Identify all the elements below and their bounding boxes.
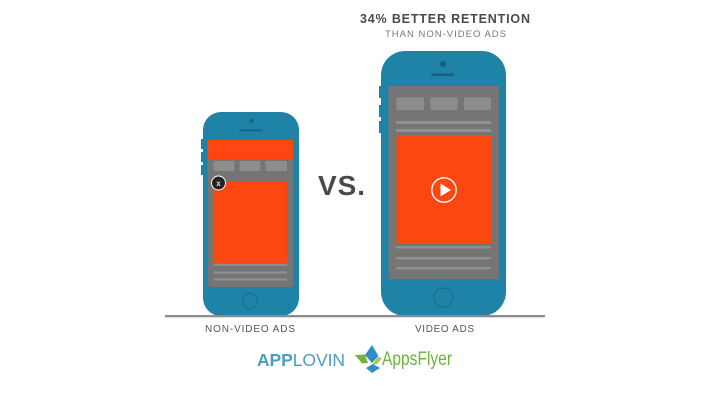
home button bbox=[242, 294, 258, 308]
heading: retention claim bbox=[360, 12, 530, 40]
close button bbox=[212, 176, 226, 190]
label: video ads: VIDEO ADS bbox=[415, 324, 474, 335]
content lines bottom bbox=[396, 246, 491, 270]
heading: retention claim: 34% BETTER RETENTION bbox=[360, 12, 530, 26]
content lines top bbox=[396, 121, 491, 132]
heading: retention claim: THAN NON-VIDEO ADS bbox=[385, 29, 506, 40]
phone: non-video ads bbox=[201, 112, 299, 316]
content lines bbox=[214, 264, 287, 280]
logo: AppsFlyer bbox=[355, 345, 453, 373]
phone: video ads bbox=[379, 51, 506, 316]
video ad bbox=[396, 136, 491, 243]
tabs bbox=[214, 161, 287, 171]
full-screen ad bbox=[214, 181, 287, 263]
tabs bbox=[396, 98, 491, 110]
vs label: VS. bbox=[318, 170, 365, 201]
home button bbox=[434, 288, 453, 307]
logo: AppsFlyer: AppsFlyer bbox=[382, 349, 453, 370]
logo: AppLovin: APPLOVIN bbox=[257, 350, 345, 370]
icon: AppsFlyer mark bbox=[355, 345, 382, 373]
ground line bbox=[165, 315, 545, 317]
label: non-video ads: NON-VIDEO ADS bbox=[205, 324, 295, 335]
close button: x bbox=[216, 179, 221, 188]
play button bbox=[432, 178, 456, 202]
top banner ad bbox=[208, 140, 293, 159]
